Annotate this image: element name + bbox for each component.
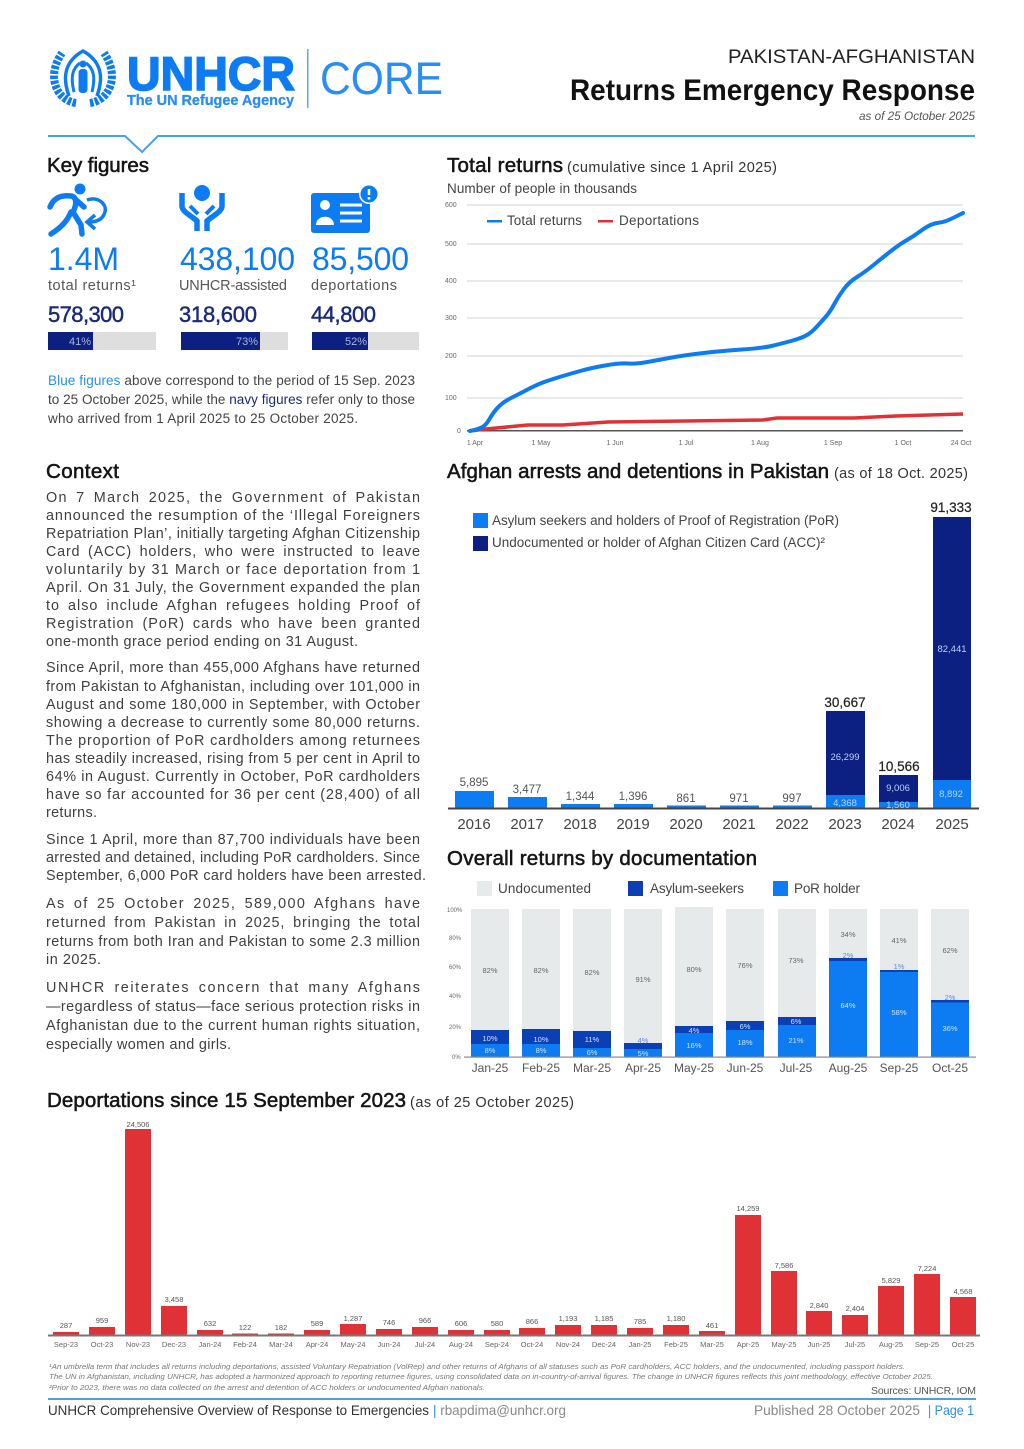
year labels: 2019 bbox=[616, 816, 650, 833]
line: total returns bbox=[470, 213, 963, 431]
month labels: Jan-25 bbox=[629, 1340, 651, 1349]
undocumented percentages: 82% bbox=[482, 966, 498, 975]
heading: total returns: Total returns bbox=[447, 154, 563, 177]
value labels: 7,224 bbox=[918, 1264, 936, 1273]
PoR holder percentages: 16% bbox=[686, 1041, 702, 1050]
asylum-seeker percentages: 1% bbox=[894, 962, 905, 971]
figure: UNHCR-assisted bbox=[179, 241, 295, 350]
year labels bbox=[457, 816, 969, 833]
paragraph 5: —regardless of status—face serious protection risks in bbox=[46, 999, 420, 1015]
month labels: May-25 bbox=[674, 1061, 714, 1075]
year labels: 2024 bbox=[881, 816, 915, 833]
paragraph 3: arrested and detained, including PoR cardholders. Since bbox=[46, 850, 420, 866]
panel: overall returns by documentation bbox=[447, 847, 976, 1075]
undocumented percentages bbox=[482, 930, 958, 984]
year labels: 2022 bbox=[775, 816, 809, 833]
month labels: Apr-25 bbox=[625, 1061, 661, 1075]
asylum-seeker percentages: 4% bbox=[638, 1036, 649, 1045]
paragraph 2: from Pakistan to Afghanistan, including over 101,000 in bbox=[46, 679, 420, 695]
legend bbox=[487, 213, 699, 228]
logo wordmark: UNHCR bbox=[127, 47, 295, 100]
paragraph 2: Since April, more than 455,000 Afghans have returned bbox=[46, 660, 420, 676]
red bars bbox=[53, 1129, 976, 1335]
value labels: 1,344 bbox=[566, 791, 595, 803]
PoR holder percentages: 8% bbox=[485, 1046, 496, 1055]
footnotes bbox=[49, 1364, 933, 1392]
legend: Undocumented bbox=[498, 881, 591, 896]
y axis labels: 200 bbox=[445, 353, 457, 360]
date: as of 25 October 2025 bbox=[859, 111, 976, 123]
value labels: 5,895 bbox=[460, 777, 488, 789]
figure: total returns: 578,300 bbox=[48, 302, 124, 327]
value labels: 8,892 bbox=[939, 789, 963, 800]
y axis labels: 400 bbox=[445, 278, 457, 285]
y axis labels: 100% bbox=[447, 908, 463, 914]
heading note: (as of 25 October 2025) bbox=[410, 1095, 574, 1111]
month labels: Jun-25 bbox=[808, 1340, 830, 1349]
paragraph 5: especially women and girls. bbox=[46, 1037, 231, 1053]
value labels: 959 bbox=[96, 1316, 108, 1325]
month labels: Oct-23 bbox=[91, 1340, 113, 1349]
value labels: 580 bbox=[491, 1319, 503, 1328]
asylum-seeker percentages: 4% bbox=[689, 1026, 700, 1035]
bars by year bbox=[455, 517, 971, 808]
figure: UNHCR-assisted: UNHCR-assisted bbox=[179, 278, 287, 294]
asylum-seeker percentages: 10% bbox=[533, 1035, 549, 1044]
note on figures bbox=[47, 373, 415, 426]
undocumented percentages: 82% bbox=[533, 966, 549, 975]
x axis labels: 24 Oct bbox=[951, 440, 971, 447]
PoR holder percentages bbox=[485, 1001, 958, 1058]
line: deportations bbox=[470, 414, 963, 431]
panel: context bbox=[46, 460, 426, 1053]
paragraph 4: returns from both Iran and Pakistan to some 2.3 million bbox=[46, 934, 420, 950]
PoR holder percentages: 5% bbox=[638, 1049, 649, 1058]
stacked bars bbox=[471, 907, 969, 1057]
legend bbox=[477, 881, 860, 896]
paragraph 2: have so far accounted for 36 per cent (28,400) of all bbox=[46, 787, 420, 803]
paragraph 4 bbox=[46, 896, 420, 968]
y axis labels: 300 bbox=[445, 315, 457, 322]
figure: deportations: 85,500 bbox=[312, 241, 409, 277]
y axis labels: 100 bbox=[445, 395, 457, 402]
month labels: Aug-24 bbox=[449, 1340, 473, 1349]
footnotes: The UN in Afghanistan, including UNHCR, has adopted a harmonized approach to reporting returnee figures, using consolidated data on in-country-of-arrival figures. The change in UNHCR figures reflects this joint methodology, effective October 2025. bbox=[49, 1374, 933, 1381]
asylum-seeker percentages: 6% bbox=[740, 1022, 751, 1031]
value labels bbox=[60, 1120, 972, 1332]
y axis labels bbox=[447, 908, 463, 1061]
panel: key figures bbox=[47, 154, 419, 426]
month labels: Oct-24 bbox=[521, 1340, 543, 1349]
undocumented percentages: 73% bbox=[788, 956, 804, 965]
y axis labels: 40% bbox=[449, 994, 462, 1000]
figure: UNHCR-assisted: 73% bbox=[236, 336, 258, 348]
month labels: Jul-25 bbox=[780, 1061, 813, 1075]
month labels: Aug-25 bbox=[879, 1340, 903, 1349]
PoR holder percentages: 8% bbox=[536, 1046, 547, 1055]
month labels: Oct-25 bbox=[932, 1061, 968, 1075]
legend: Asylum-seekers bbox=[650, 881, 744, 896]
paragraph 1: Card (ACC) holders, who were instructed to leave bbox=[46, 544, 420, 560]
undocumented percentages: 41% bbox=[891, 936, 907, 945]
month labels: May-24 bbox=[340, 1340, 366, 1349]
panel: arrests and detentions chart bbox=[447, 460, 979, 833]
heading note: (cumulative since 1 April 2025) bbox=[567, 160, 777, 176]
y axis labels: 500 bbox=[445, 241, 457, 248]
legend: Total returns bbox=[507, 213, 582, 228]
paragraph 4: returned from Pakistan in 2025, bringing the total bbox=[46, 915, 420, 931]
paragraph 5 bbox=[46, 980, 420, 1053]
paragraph 1: voluntarily by 31 March or face deportation from 1 bbox=[46, 562, 420, 578]
value labels: 5,829 bbox=[882, 1276, 900, 1285]
y axis labels: 0% bbox=[452, 1055, 461, 1061]
legend: Asylum seekers and holders of Proof of Registration (PoR) bbox=[492, 513, 839, 528]
undocumented percentages: 76% bbox=[737, 961, 753, 970]
x axis labels: 1 Apr bbox=[467, 440, 484, 447]
value labels: 997 bbox=[782, 793, 802, 805]
year labels: 2018 bbox=[563, 816, 597, 833]
title: Returns Emergency Response bbox=[570, 74, 975, 107]
figure: deportations: 44,800 bbox=[311, 302, 376, 327]
heading note: (as of 18 Oct. 2025) bbox=[834, 466, 968, 482]
value labels: 30,667 bbox=[824, 695, 866, 710]
paragraph 2: August and some 180,000 in September, with October bbox=[46, 697, 420, 713]
value labels: 971 bbox=[729, 793, 749, 805]
year labels: 2016 bbox=[457, 816, 491, 833]
legend: PoR holder bbox=[794, 881, 860, 896]
paragraph 2 bbox=[46, 660, 420, 821]
value labels: 1,180 bbox=[667, 1314, 685, 1323]
figure: UNHCR-assisted: 318,600 bbox=[179, 302, 257, 327]
figure: UNHCR-assisted: 438,100 bbox=[180, 241, 295, 277]
value labels: 26,299 bbox=[830, 752, 860, 763]
value labels: 2,404 bbox=[846, 1304, 864, 1313]
figure: total returns: total returns¹ bbox=[48, 278, 136, 294]
PoR holder percentages: 18% bbox=[737, 1038, 753, 1047]
heading: overall returns: Overall returns by documentation bbox=[447, 847, 757, 870]
month labels bbox=[54, 1340, 974, 1349]
x axis labels: 1 May bbox=[531, 440, 551, 447]
heading: deportations: Deportations since 15 September 2023 bbox=[47, 1089, 406, 1112]
value labels: 14,259 bbox=[737, 1204, 759, 1213]
value labels: 866 bbox=[526, 1317, 538, 1326]
value labels: 7,586 bbox=[775, 1261, 793, 1270]
header bbox=[48, 46, 976, 152]
y axis labels: 0 bbox=[457, 428, 461, 435]
month labels: Apr-25 bbox=[737, 1340, 759, 1349]
undocumented percentages: 62% bbox=[942, 946, 958, 955]
footer bbox=[48, 1402, 974, 1418]
month labels: Jul-24 bbox=[415, 1340, 435, 1349]
figure: deportations: 52% bbox=[345, 336, 367, 348]
value labels: 589 bbox=[311, 1319, 323, 1328]
paragraph 5: UNHCR reiterates concern that many Afghans bbox=[46, 980, 420, 996]
undocumented percentages: 82% bbox=[584, 968, 600, 977]
icon: hands holding person bbox=[182, 185, 222, 231]
figure: deportations bbox=[311, 241, 419, 350]
paragraph 1: April. On 31 July, the Government expanded the plan bbox=[46, 580, 420, 596]
asylum-seeker percentages: 10% bbox=[482, 1034, 498, 1043]
year labels: 2025 bbox=[935, 816, 969, 833]
value labels: 1,193 bbox=[559, 1314, 577, 1323]
month labels: Dec-23 bbox=[162, 1340, 186, 1349]
month labels: Mar-24 bbox=[269, 1340, 293, 1349]
month labels: Nov-23 bbox=[126, 1340, 150, 1349]
figure: total returns: 41% bbox=[69, 336, 91, 348]
month labels bbox=[472, 1061, 968, 1075]
legend: Undocumented or holder of Afghan Citizen Card (ACC)² bbox=[492, 535, 826, 550]
month labels: Sep-24 bbox=[485, 1340, 509, 1349]
sources: Sources: UNHCR, IOM bbox=[871, 1385, 976, 1397]
publication date: Published 28 October 2025 bbox=[754, 1402, 920, 1418]
paragraph 1: one-month grace period ending on 31 August. bbox=[46, 634, 358, 650]
heading: context: Context bbox=[46, 460, 119, 483]
asylum-seeker percentages bbox=[482, 951, 956, 1045]
note on figures: to 25 October 2025, while the navy figures refer only to those bbox=[48, 392, 415, 407]
month labels: Aug-25 bbox=[829, 1061, 868, 1075]
value labels: 4,368 bbox=[833, 798, 857, 809]
paragraph 2: returns. bbox=[46, 805, 97, 821]
month labels: Jan-24 bbox=[199, 1340, 221, 1349]
title: location: PAKISTAN-AFGHANISTAN bbox=[728, 46, 975, 68]
heading: key figures: Key figures bbox=[47, 154, 149, 177]
value labels: 1,287 bbox=[344, 1314, 362, 1323]
value labels: 966 bbox=[419, 1316, 431, 1325]
y axis labels: 20% bbox=[449, 1025, 462, 1031]
paragraph 2: The proportion of PoR cardholders among returnees bbox=[46, 733, 420, 749]
footer title: UNHCR Comprehensive Overview of Response to Emergencies bbox=[48, 1402, 429, 1418]
month labels: Oct-25 bbox=[952, 1340, 974, 1349]
PoR holder percentages: 58% bbox=[891, 1008, 907, 1017]
value labels: 9,006 bbox=[886, 783, 910, 794]
y axis labels: 60% bbox=[449, 965, 462, 971]
x axis labels: 1 Sep bbox=[824, 440, 842, 447]
value labels: 861 bbox=[676, 793, 696, 805]
value labels: 1,560 bbox=[886, 800, 910, 811]
month labels: May-25 bbox=[771, 1340, 797, 1349]
undocumented percentages: 80% bbox=[686, 965, 702, 974]
month labels: Feb-25 bbox=[522, 1061, 560, 1075]
x axis labels: 1 Jun bbox=[606, 440, 624, 447]
month labels: Mar-25 bbox=[573, 1061, 611, 1075]
value labels: 606 bbox=[455, 1319, 467, 1328]
month labels: Jun-25 bbox=[727, 1061, 764, 1075]
y axis labels bbox=[445, 202, 461, 435]
footer contact: | rbapdima@unhcr.org bbox=[433, 1402, 566, 1418]
paragraph 4: As of 25 October 2025, 589,000 Afghans have bbox=[46, 896, 420, 912]
x axis labels: 1 Aug bbox=[751, 440, 769, 447]
asylum-seeker percentages: 6% bbox=[791, 1017, 802, 1026]
month labels: Dec-24 bbox=[592, 1340, 616, 1349]
month labels: Nov-24 bbox=[556, 1340, 580, 1349]
undocumented percentages: 34% bbox=[840, 930, 856, 939]
month labels: Apr-24 bbox=[306, 1340, 328, 1349]
value labels: 461 bbox=[706, 1321, 718, 1330]
value labels: 10,566 bbox=[878, 759, 920, 774]
note on figures: Blue figures above correspond to the period of 15 Sep. 2023 bbox=[48, 373, 415, 388]
CORE wordmark: CORE bbox=[320, 53, 443, 104]
legend bbox=[473, 513, 839, 551]
paragraph 3 bbox=[46, 832, 426, 884]
figure: deportations: deportations bbox=[311, 278, 397, 294]
paragraph 1: On 7 March 2025, the Government of Pakistan bbox=[46, 490, 420, 506]
year labels: 2017 bbox=[510, 816, 544, 833]
y axis labels: 80% bbox=[449, 936, 462, 942]
value labels: 1,185 bbox=[595, 1314, 613, 1323]
undocumented percentages: 91% bbox=[635, 975, 651, 984]
value labels: 3,477 bbox=[513, 784, 541, 796]
value labels: 287 bbox=[60, 1321, 72, 1330]
asylum-seeker percentages: 2% bbox=[843, 951, 854, 960]
note on figures: who arrived from 1 April 2025 to 25 October 2025. bbox=[47, 411, 358, 426]
x axis labels: 1 Jul bbox=[679, 440, 694, 447]
panel: deportations chart bbox=[47, 1089, 980, 1349]
figure: total returns: 1.4M bbox=[48, 241, 119, 277]
legend: Deportations bbox=[619, 213, 699, 228]
logo tagline: The UN Refugee Agency bbox=[127, 93, 294, 109]
x axis labels: 1 Oct bbox=[895, 440, 911, 447]
icon: UNHCR logo emblem bbox=[54, 51, 112, 103]
paragraph 2: showing a decrease to currently some 80,000 returns. bbox=[46, 715, 420, 731]
value labels: 91,333 bbox=[930, 500, 972, 515]
PoR holder percentages: 36% bbox=[942, 1024, 958, 1033]
asylum-seeker percentages: 2% bbox=[945, 993, 956, 1002]
value labels: 2,840 bbox=[810, 1301, 828, 1310]
value labels bbox=[460, 500, 972, 811]
paragraph 1: announced the resumption of the ‘Illegal Foreigners bbox=[46, 508, 420, 524]
month labels: Feb-25 bbox=[664, 1340, 688, 1349]
value labels: 632 bbox=[204, 1319, 216, 1328]
month labels: Jun-24 bbox=[378, 1340, 400, 1349]
PoR holder percentages: 21% bbox=[788, 1036, 804, 1045]
chart subtitle: Number of people in thousands bbox=[447, 181, 637, 196]
PoR holder percentages: 6% bbox=[587, 1048, 598, 1057]
month labels: Mar-25 bbox=[700, 1340, 724, 1349]
paragraph 1: Registration (PoR) cards who have been granted bbox=[46, 616, 420, 632]
paragraph 3: Since 1 April, more than 87,700 individuals have been bbox=[46, 832, 420, 848]
icon: runner with return arrow bbox=[50, 184, 105, 234]
page number: | Page 1 bbox=[928, 1402, 974, 1418]
year labels: 2023 bbox=[828, 816, 862, 833]
paragraph 4: in 2025. bbox=[46, 952, 101, 968]
value labels: 82,441 bbox=[937, 644, 967, 655]
value labels: 1,396 bbox=[619, 791, 647, 803]
panel: total returns line chart bbox=[445, 154, 971, 447]
paragraph 1: Repatriation Plan’, initially targeting Afghan Citizenship bbox=[46, 526, 420, 542]
PoR holder percentages: 64% bbox=[840, 1001, 856, 1010]
value labels: 24,506 bbox=[127, 1120, 149, 1129]
y axis labels: 600 bbox=[445, 202, 457, 209]
footnotes: ¹An umbrella term that includes all returns including deportations, assisted Voluntary Repatriation (VolRep) and other returns of Afghans of all statuses such as PoR cardholders, ACC holders, and the undocumented, including passport holders. bbox=[49, 1364, 905, 1371]
heading: arrests and detentions: Afghan arrests and detentions in Pakistan bbox=[447, 460, 829, 483]
asylum-seeker percentages: 11% bbox=[585, 1035, 600, 1044]
value labels: 182 bbox=[275, 1323, 287, 1332]
value labels: 4,568 bbox=[954, 1287, 972, 1296]
value labels: 785 bbox=[634, 1317, 646, 1326]
year labels: 2020 bbox=[669, 816, 703, 833]
paragraph 5: Afghanistan due to the current human rights situation, bbox=[46, 1018, 420, 1034]
paragraph 1: to also include Afghan refugees holding Proof of bbox=[46, 598, 421, 614]
paragraph 3: September, 6,000 PoR card holders have been arrested. bbox=[46, 868, 426, 884]
month labels: Jan-25 bbox=[472, 1061, 509, 1075]
figure: total returns bbox=[48, 241, 156, 350]
year labels: 2021 bbox=[722, 816, 756, 833]
paragraph 2: has steadily increased, rising from 5 per cent in April to bbox=[46, 751, 420, 767]
month labels: Jul-25 bbox=[845, 1340, 865, 1349]
paragraph 2: 64% in August. Currently in October, PoR cardholders bbox=[46, 769, 420, 785]
icon: ID card with alert bbox=[311, 184, 379, 233]
x axis labels bbox=[467, 440, 971, 447]
month labels: Feb-24 bbox=[233, 1340, 257, 1349]
value labels: 3,458 bbox=[165, 1295, 183, 1304]
month labels: Sep-25 bbox=[915, 1340, 939, 1349]
footnotes: ²Prior to 2023, there was no data collected on the arrest and detention of ACC holders or undocumented Afghan nationals. bbox=[49, 1385, 485, 1392]
value labels: 122 bbox=[239, 1323, 251, 1332]
value labels: 746 bbox=[383, 1318, 395, 1327]
month labels: Sep-25 bbox=[880, 1061, 919, 1075]
month labels: Sep-23 bbox=[54, 1340, 78, 1349]
paragraph 1 bbox=[46, 490, 421, 650]
